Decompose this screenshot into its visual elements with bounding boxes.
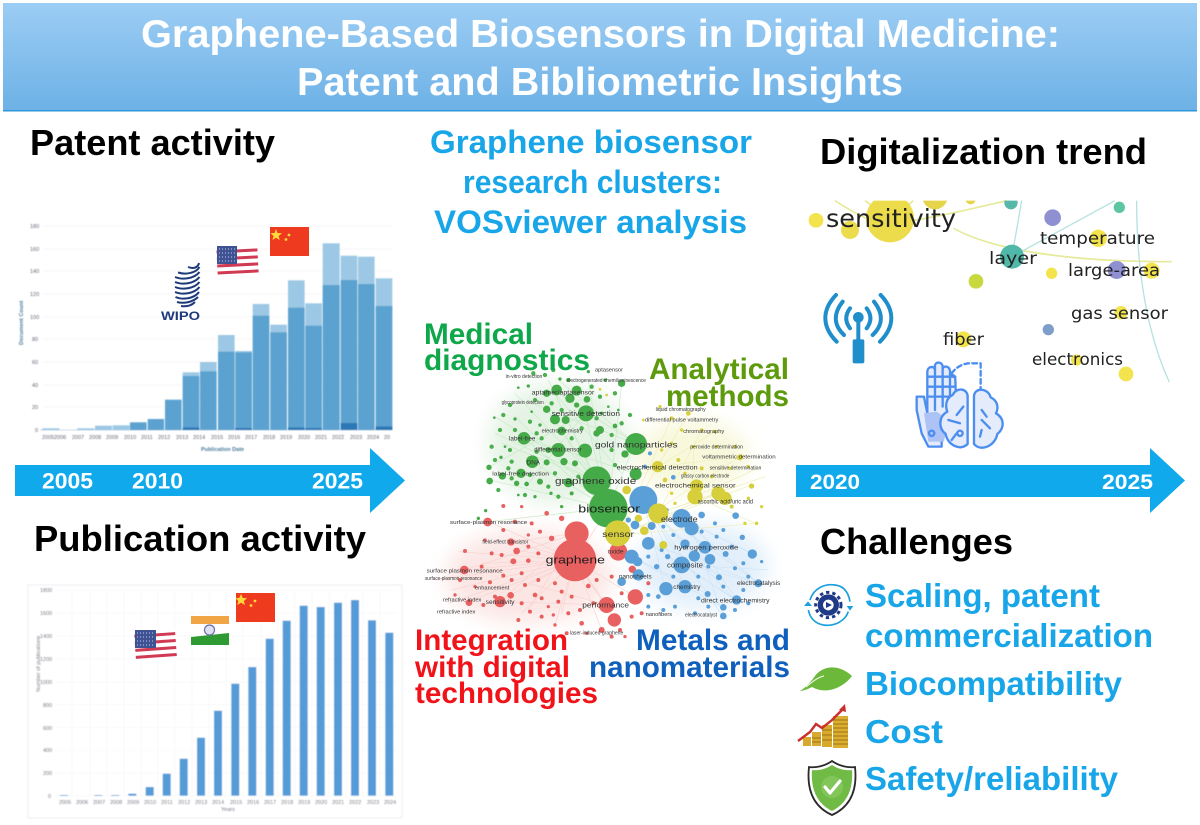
axis labels: 2020 [298, 435, 310, 441]
axis labels: 2009 [106, 435, 118, 441]
axis labels: 2012 [158, 435, 170, 441]
network labels: biosensor [578, 504, 641, 516]
publication bar chart: Years [221, 807, 235, 813]
network labels: peroxide determination [690, 444, 743, 450]
network labels: hydrogen peroxide [674, 544, 739, 551]
network labels: electrochemistry [542, 429, 583, 435]
timeline arrow: digitalization 2020-2025 [796, 448, 1185, 513]
publication bar chart: 400 [43, 748, 52, 754]
network labels: differential pulse voltammetry [645, 418, 718, 424]
network labels: enhancement [475, 585, 510, 591]
publication bar chart: 2024 [384, 800, 396, 806]
publication bar chart: 2017 [264, 800, 276, 806]
axis labels: 2019 [280, 435, 292, 441]
network labels: surface-plasmon resonance [425, 576, 482, 582]
axis labels: 2011 [141, 435, 153, 441]
label: metals and nanomaterials [589, 624, 790, 684]
publication bar chart [28, 585, 402, 818]
axis labels [19, 224, 390, 453]
icon: China flag (patents) [270, 227, 309, 256]
publication bar chart: 1600 [40, 611, 52, 617]
keyword labels: layer [989, 249, 1037, 269]
blue cluster: metals and nanomaterials [617, 451, 763, 619]
axis labels: Document Count [19, 301, 25, 345]
axis labels: 120 [30, 292, 39, 298]
label: analytical methods: methods [666, 380, 789, 413]
icon: China flag (publications) [236, 593, 275, 622]
title banner: Patent and Bibliometric Insights [297, 61, 903, 104]
publication bar chart: Number of publications [36, 635, 42, 692]
publication bar chart: 2011 [161, 800, 173, 806]
network labels: sensitive determination [710, 465, 761, 471]
label: integration with digital technologies: with digital [414, 651, 570, 684]
axis labels: 40 [32, 383, 38, 389]
heading: research clusters [430, 124, 752, 240]
timeline arrow: patents 2005-2025: 2025 [312, 468, 363, 494]
network labels [425, 367, 780, 637]
keyword labels: gas sensor [1071, 304, 1168, 324]
network labels: chromatography [683, 429, 724, 435]
publication bar chart: 1200 [40, 657, 52, 663]
digitalization keyword map [809, 184, 1172, 382]
publication bar chart: 200 [43, 771, 52, 777]
network labels: sensitive detection [552, 411, 620, 418]
dark bars [130, 280, 392, 430]
network labels: electrode [661, 515, 698, 524]
publication bar chart: 2007 [93, 800, 105, 806]
network labels: graphene [546, 555, 605, 567]
extra small green nodes [492, 370, 630, 497]
axis labels: 60 [32, 360, 38, 366]
green cluster: medical diagnostics [477, 370, 647, 528]
axis labels: 2015 [211, 435, 223, 441]
publication bar chart: 2013 [195, 800, 207, 806]
keyword labels: large-area [1068, 261, 1160, 281]
network labels: surface-plasmon resonance [450, 520, 527, 526]
axis labels: 2021 [315, 435, 327, 441]
axis labels: 2017 [245, 435, 257, 441]
heading: challenges: Challenges [820, 521, 1013, 562]
axis labels: 2016 [228, 435, 240, 441]
publication bar chart: 0 [48, 794, 51, 800]
heading: research clusters: VOSviewer analysis [434, 204, 747, 240]
light bars [42, 243, 392, 430]
heading: publication activity: Publication activity [34, 518, 366, 559]
label: integration with digital technologies: technologies [415, 677, 598, 710]
challenge: cost: Cost [865, 713, 943, 750]
challenge: safety/reliability: Safety/reliability [865, 760, 1119, 797]
icon: gear cycle [804, 585, 853, 625]
publication bar chart: 600 [43, 726, 52, 732]
axis labels: 20 [32, 405, 38, 411]
network labels: direct electrochemistry [701, 598, 770, 604]
axis labels: 80 [32, 337, 38, 343]
network labels: performance [582, 601, 629, 610]
axis labels: 140 [30, 269, 39, 275]
publication bar chart: 2006 [76, 800, 88, 806]
title banner [3, 3, 1197, 112]
network labels: electrocatalyst [685, 613, 717, 619]
extra small yellow nodes [662, 430, 762, 523]
label: integration with digital technologies: Integration [415, 624, 568, 657]
publication bar chart: 1400 [40, 634, 52, 640]
timeline arrow: digitalization 2020-2025: 2025 [1102, 471, 1153, 494]
axis labels: Publication Date [201, 447, 244, 453]
network labels: field-effect transistor [482, 540, 528, 546]
extra small red nodes [460, 522, 648, 637]
axis labels: 2006 [54, 435, 66, 441]
network labels: electrogenerated chemiluminescence [567, 378, 646, 384]
network labels: nanofibers [646, 612, 672, 618]
publication bar chart: 1800 [40, 588, 52, 594]
VOSviewer network map [425, 367, 780, 638]
network labels: refractive index [437, 609, 476, 615]
icon: US flag (patents) [217, 246, 259, 277]
heading: research clusters: research clusters: [463, 164, 722, 200]
keyword labels: electronics [1032, 350, 1123, 370]
network labels: nanosheets [619, 573, 652, 580]
network labels: label-free detection [492, 471, 549, 477]
network labels: DNA [527, 459, 541, 466]
timeline arrow: digitalization 2020-2025: 2020 [810, 471, 860, 494]
keyword labels [826, 204, 1168, 370]
network labels: glassy carbon electrode [681, 473, 729, 479]
publication bar chart: 2016 [247, 800, 259, 806]
network labels: surface plasmon resonance [427, 568, 503, 574]
label: metals and nanomaterials: Metals and [636, 624, 790, 657]
network labels: electrochemical detection [617, 465, 698, 472]
label: medical diagnostics [424, 318, 590, 377]
icon: US flag (publications) [134, 630, 177, 661]
axis labels: 2013 [176, 435, 188, 441]
label: medical diagnostics: diagnostics [424, 344, 590, 377]
axis labels: 160 [30, 247, 39, 253]
publication bar chart: 2021 [332, 800, 344, 806]
publication bar chart: 2020 [315, 800, 327, 806]
axis labels: 2005 [42, 435, 54, 441]
network labels: liquid chromatography [656, 407, 706, 413]
challenge: cost [798, 704, 943, 750]
axis labels: 0 [35, 428, 38, 434]
icon: coins and rising arrow [798, 704, 848, 748]
network labels: oxide [608, 549, 624, 556]
label: analytical methods [649, 353, 789, 413]
axis labels: 2007 [72, 435, 84, 441]
patent bar chart [19, 224, 392, 453]
publication bar chart: 800 [43, 703, 52, 709]
publication bar chart: 2019 [298, 800, 310, 806]
label: analytical methods: Analytical [649, 353, 789, 386]
axis labels: 2022 [332, 435, 344, 441]
axis labels: 2023 [350, 435, 362, 441]
timeline arrow: patents 2005-2025: 2005 [42, 468, 93, 494]
axis labels: 2014 [193, 435, 205, 441]
extra small blue nodes [645, 467, 748, 613]
publication bar chart: 2012 [178, 800, 190, 806]
heading: patent activity: Patent activity [30, 122, 275, 163]
timeline arrow: patents 2005-2025 [15, 448, 405, 513]
publication bar chart: 2010 [144, 800, 156, 806]
network labels: electrocatalysis [737, 581, 780, 587]
network labels: chemistry [673, 584, 701, 591]
challenge: scaling, patent commercialization: commercialization [865, 617, 1153, 654]
keyword labels: temperature [1040, 229, 1155, 249]
challenge: scaling, patent commercialization: Scaling, patent [865, 577, 1100, 614]
network labels: differential sensor [534, 447, 582, 453]
icon: leaf [800, 667, 852, 691]
axis labels: 180 [30, 224, 39, 230]
timeline arrow: patents 2005-2025: 2010 [132, 468, 183, 494]
axis labels: 2018 [263, 435, 275, 441]
publication bar chart: 2009 [127, 800, 139, 806]
publication bar chart: 2023 [367, 800, 379, 806]
title banner: Graphene-Based Biosensors in Digital Medicine: [141, 13, 1060, 56]
network labels: graphene oxide [555, 476, 636, 486]
axis labels: 2008 [89, 435, 101, 441]
challenge: biocompatibility: Biocompatibility [865, 665, 1123, 702]
network labels: ascorbic acid/uric acid [698, 500, 753, 506]
axis labels: 20 [384, 435, 390, 441]
heading: research clusters: Graphene biosensor [430, 124, 752, 160]
network labels: aptasensor [595, 367, 623, 373]
challenge: scaling, patent commercialization [804, 577, 1153, 654]
network labels: gold nanoparticles [595, 439, 678, 449]
network labels: label-free [509, 436, 536, 443]
publication bar chart: 2014 [212, 800, 224, 806]
keyword labels: fiber [943, 330, 984, 350]
network labels: composite [667, 560, 703, 569]
axis labels: 2024 [367, 435, 379, 441]
icon: WIPO logo: WIPO [161, 311, 200, 323]
challenge: safety/reliability [808, 760, 1119, 815]
label: integration with digital technologies [414, 624, 598, 710]
icon: WIPO logo [161, 263, 200, 323]
label: medical diagnostics: Medical [424, 318, 533, 351]
publication bar chart: 2005 [59, 800, 71, 806]
network labels: refractive index [443, 598, 482, 604]
network labels: aptamer/aptasensor [532, 390, 595, 397]
publication bar chart: 2022 [349, 800, 361, 806]
icon: India flag [191, 616, 229, 645]
network labels: in-vitro detection [506, 374, 542, 380]
network labels: laser-induced graphene [570, 631, 623, 637]
publication bar chart: 2008 [110, 800, 122, 806]
icon: wireless antenna [825, 295, 891, 363]
axis labels: 2010 [124, 435, 136, 441]
publication bar chart: 2015 [230, 800, 242, 806]
label: metals and nanomaterials: nanomaterials [589, 651, 790, 684]
network labels: sensor [602, 529, 634, 539]
publication bar chart: 1000 [40, 680, 52, 686]
network labels: sensitivity [486, 599, 515, 606]
network labels: electrochemical sensor [655, 482, 737, 489]
network labels: voltammetric determination [702, 455, 776, 461]
heading: digitalization trend: Digitalization trend [820, 131, 1147, 172]
network labels: glycoprotein detection [502, 400, 544, 406]
yellow cluster: analytical methods [599, 388, 758, 549]
red cluster: integration [453, 504, 643, 638]
axis labels: 100 [30, 315, 39, 321]
icon: hand and brain [917, 363, 1003, 448]
keyword labels: sensitivity [826, 204, 956, 233]
icon: shield with check [808, 761, 856, 815]
publication bar chart: 2018 [281, 800, 293, 806]
